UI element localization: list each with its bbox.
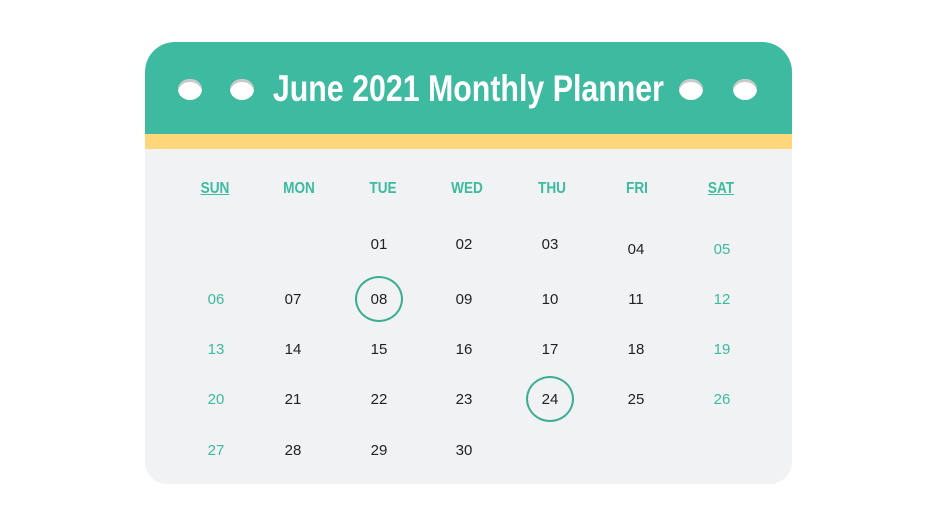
title: June 2021 Monthly Planner: [273, 68, 664, 109]
header bar: [145, 42, 792, 134]
dates grid: 03: [542, 236, 558, 253]
dates grid: 15: [371, 341, 387, 358]
dates grid: 19: [714, 341, 730, 358]
dates grid: 05: [714, 241, 730, 258]
dates grid: 26: [714, 391, 730, 408]
dates grid: 21: [285, 391, 301, 408]
dates grid: 02: [456, 236, 472, 253]
weekday headers: SAT: [708, 180, 734, 197]
dates grid: 23: [456, 391, 472, 408]
weekday headers: TUE: [369, 180, 397, 197]
dates grid: 10: [542, 291, 558, 308]
dates grid: 07: [285, 291, 301, 308]
icon: holes: [178, 79, 757, 100]
dates grid: 29: [371, 442, 387, 459]
dates grid: 13: [208, 341, 224, 358]
dates grid: 27: [208, 442, 224, 459]
dates grid: 16: [456, 341, 472, 358]
circle: 24: [526, 376, 574, 422]
dates grid: 09: [456, 291, 472, 308]
weekday headers: SUN: [201, 180, 229, 197]
dates grid: 18: [628, 341, 644, 358]
dates grid: 20: [208, 391, 224, 408]
dates grid: 22: [371, 391, 387, 408]
weekday headers: [200, 180, 734, 197]
circle: 08: [355, 276, 403, 322]
weekday headers: MON: [283, 180, 315, 197]
dates grid: 01: [371, 236, 387, 253]
dates grid: 17: [542, 341, 558, 358]
dates grid: [208, 236, 730, 459]
dates grid: 08: [371, 291, 387, 308]
dates grid: 12: [714, 291, 730, 308]
calendar card: [145, 42, 792, 484]
weekday headers: THU: [538, 180, 566, 197]
dates grid: 14: [285, 341, 301, 358]
dates grid: 06: [208, 291, 224, 308]
dates grid: 24: [542, 391, 558, 408]
yellow strip: [145, 134, 792, 149]
weekday headers: FRI: [626, 180, 648, 197]
weekday headers: WED: [451, 180, 483, 197]
dates grid: 11: [628, 291, 644, 308]
dates grid: 30: [456, 442, 472, 459]
dates grid: 04: [628, 241, 644, 258]
dates grid: 28: [285, 442, 301, 459]
dates grid: 25: [628, 391, 644, 408]
